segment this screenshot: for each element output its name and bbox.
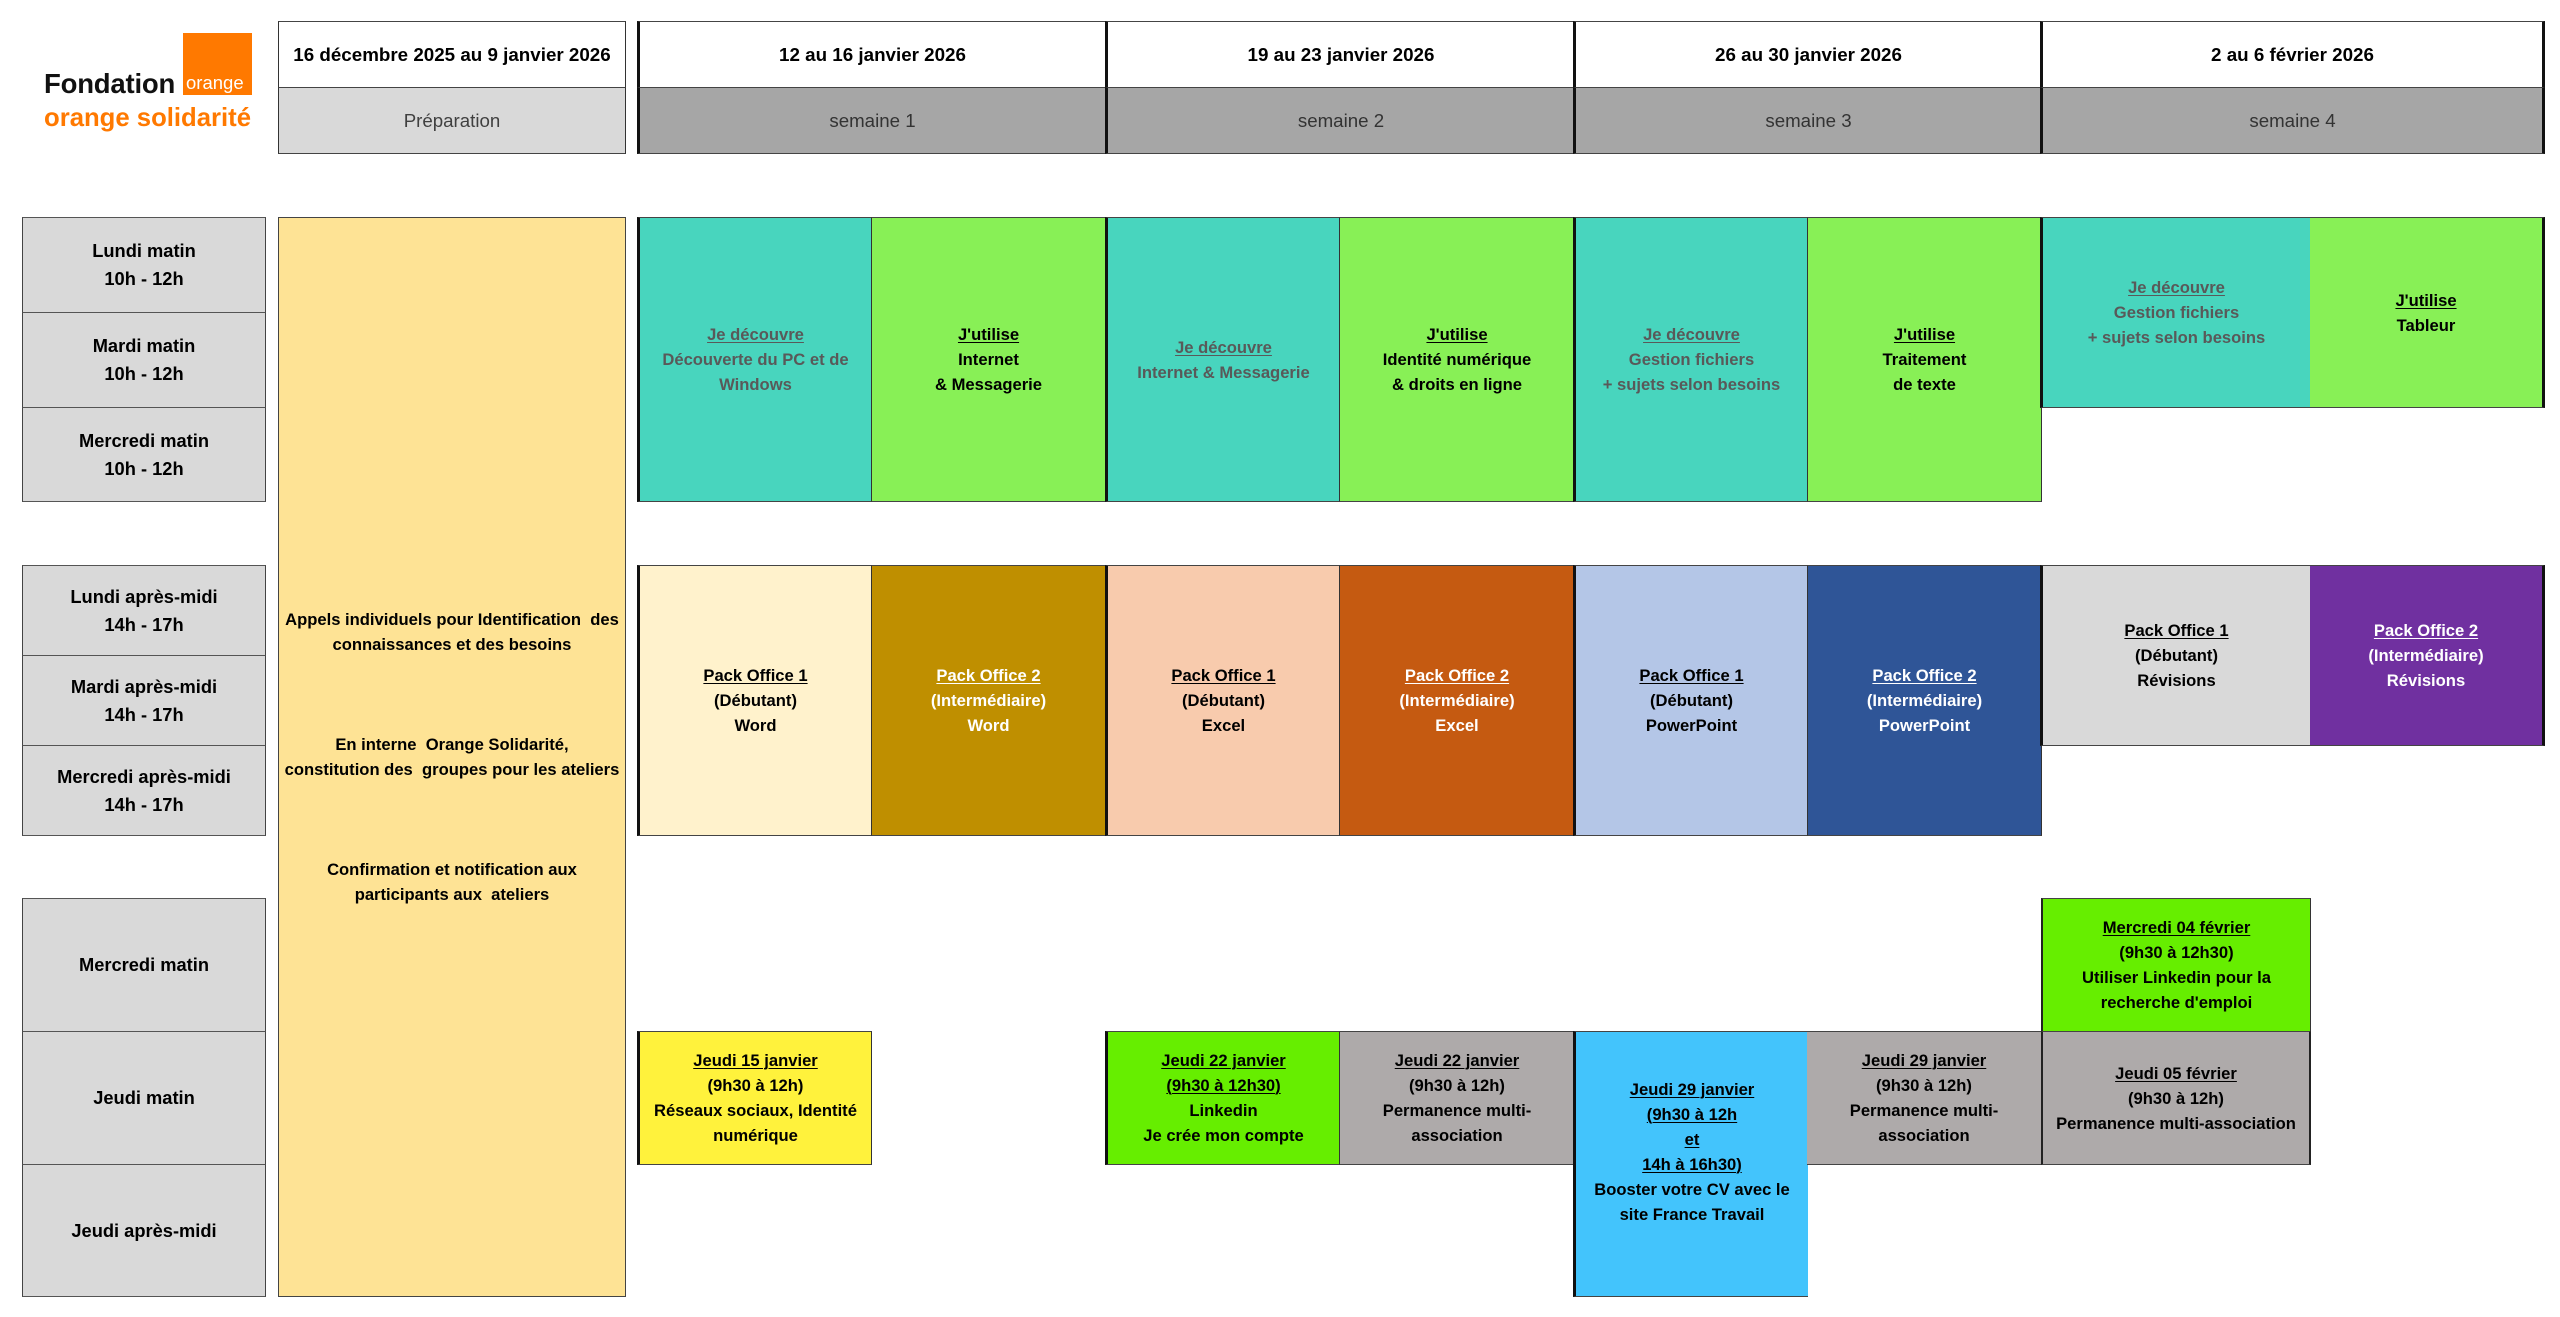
- cell: S2 Pack Office 1 Excel: (Débutant): [1182, 691, 1265, 710]
- cell: S1 Pack Office 1 Word: (Débutant): [714, 691, 797, 710]
- cell: S4 J'utilise: Tableur: [2397, 316, 2455, 334]
- cell: S3 J'utilise: de texte: [1893, 375, 1956, 394]
- header: week 4 dates: [2040, 21, 2545, 88]
- row label: Mardi après-midi: Mardi après-midi: [71, 676, 217, 696]
- cell: Jeudi 29 janvier permanence: (9h30 à 12h): [1876, 1076, 1972, 1095]
- cell: Jeudi 22 janvier Linkedin: Linkedin: [1189, 1101, 1258, 1120]
- cell: S4 Pack Office 1 Révisions: Pack Office 1: [2124, 621, 2229, 640]
- row label: Jeudi matin: Jeudi matin: [93, 1087, 195, 1108]
- icon: orange square: orange: [186, 72, 244, 93]
- cell: S1 Pack Office 1 Word: [637, 565, 872, 836]
- row label: Jeudi matin: [22, 1031, 266, 1165]
- cell: Jeudi 29 janvier booster CV: 14h à 16h30): [1642, 1154, 1742, 1174]
- header: semaine 2: [1105, 87, 1575, 154]
- row label: Mercredi matin (ateliers): Mercredi matin: [79, 954, 209, 975]
- cell: Jeudi 22 janvier Linkedin: [1105, 1031, 1340, 1165]
- row label: Mercredi après-midi: Mercredi après-midi: [57, 766, 231, 786]
- cell: Mercredi 04 février: Utiliser Linkedin pour la: [2082, 968, 2271, 987]
- cell: S3 Pack Office 1 PowerPoint: [1573, 565, 1808, 836]
- cell: S4 Pack Office 1 Révisions: (Débutant): [2135, 646, 2218, 665]
- row label: Mardi matin: 10h - 12h: [104, 363, 184, 384]
- cell: S2 Pack Office 2 Excel: [1339, 565, 1575, 836]
- cell: S1 Je découvre: Je découvre: [707, 325, 804, 344]
- header: week 2 dates: 19 au 23 janvier 2026: [1248, 44, 1434, 65]
- cell: S3 J'utilise: J'utilise: [1894, 325, 1955, 344]
- cell: S2 Pack Office 2 Excel: (Intermédiaire): [1399, 691, 1515, 710]
- cell: S1 Pack Office 2 Word: Word: [967, 716, 1010, 735]
- cell: S3 J'utilise: Traitement: [1883, 350, 1966, 369]
- cell: S2 Pack Office 1 Excel: Pack Office 1: [1171, 666, 1276, 685]
- cell: Jeudi 22 janvier permanence: Jeudi 22 janvier: [1395, 1051, 1519, 1070]
- cell: Jeudi 29 janvier booster CV: (9h30 à 12h: [1647, 1104, 1737, 1124]
- cell: S4 Pack Office 1 Révisions: [2040, 565, 2310, 746]
- cell: S3 Je découvre: Gestion fichiers: [1629, 350, 1754, 369]
- cell: S3 Pack Office 1 PowerPoint: (Débutant): [1650, 691, 1733, 710]
- cell: Jeudi 29 janvier permanence: association: [1878, 1126, 1970, 1145]
- row label: Mercredi matin: 10h - 12h: [104, 458, 184, 478]
- cell: S3 Pack Office 2 PowerPoint: (Intermédiaire): [1867, 691, 1982, 710]
- header: semaine 1: semaine 1: [829, 110, 916, 131]
- cell: S2 J'utilise: Identité numérique: [1383, 350, 1531, 369]
- cell: S2 Je découvre: Je découvre: [1175, 338, 1272, 356]
- cell: Jeudi 15 janvier: Jeudi 15 janvier: [693, 1051, 818, 1070]
- cell: S1 Je découvre: Windows: [719, 375, 792, 394]
- cell: S2 J'utilise: [1339, 217, 1575, 502]
- cell: Jeudi 05 février: [2041, 1031, 2311, 1165]
- cell: Jeudi 15 janvier: numérique: [713, 1126, 798, 1145]
- cell: S2 J'utilise: & droits en ligne: [1392, 375, 1522, 394]
- cell: S4 Pack Office 2 Révisions: Pack Office 2: [2374, 621, 2478, 640]
- logo: Fondation orange solidarité: [44, 33, 252, 132]
- cell: Jeudi 22 janvier permanence: [1339, 1031, 1575, 1165]
- cell: S4 Pack Office 2 Révisions: [2310, 565, 2545, 746]
- cell: Mercredi 04 février: Mercredi 04 février: [2103, 918, 2250, 937]
- panel: préparation steps: constitution des groupes pour les ateliers: [285, 760, 619, 779]
- panel: préparation steps: participants aux ateliers: [355, 885, 549, 904]
- cell: S1 J'utilise: & Messagerie: [935, 375, 1042, 394]
- cell: S1 Pack Office 2 Word: (Intermédiaire): [931, 691, 1046, 710]
- cell: Mercredi 04 février: (9h30 à 12h30): [2119, 943, 2234, 962]
- cell: S3 Pack Office 1 PowerPoint: PowerPoint: [1646, 716, 1737, 735]
- row label: Lundi matin: Lundi matin: [92, 240, 196, 261]
- cell: S2 Je découvre: Internet & Messagerie: [1137, 362, 1310, 382]
- row label: Mercredi après-midi: [22, 745, 266, 836]
- cell: S1 Pack Office 1 Word: Word: [734, 716, 777, 735]
- panel: préparation steps: [278, 217, 626, 1297]
- logo text: Fondation: Fondation: [44, 68, 175, 99]
- cell: S1 Pack Office 2 Word: [871, 565, 1106, 836]
- panel: préparation steps: Appels individuels pour Identification des: [285, 610, 619, 629]
- row label: Lundi après-midi: [22, 565, 266, 656]
- header: week 2 dates: [1105, 21, 1575, 88]
- cell: S3 Je découvre: + sujets selon besoins: [1603, 375, 1780, 394]
- cell: S3 Pack Office 2 PowerPoint: PowerPoint: [1879, 716, 1970, 735]
- row label: Jeudi après-midi: [22, 1164, 266, 1297]
- logo text: orange solidarité: orange solidarité: [44, 104, 251, 132]
- cell: S3 Pack Office 2 PowerPoint: [1807, 565, 2042, 836]
- header: semaine 3: semaine 3: [1765, 110, 1852, 131]
- cell: S3 Pack Office 2 PowerPoint: Pack Office 2: [1872, 666, 1977, 685]
- cell: Jeudi 29 janvier permanence: [1807, 1031, 2042, 1165]
- panel: préparation steps: Confirmation et notification aux: [327, 860, 577, 879]
- header: préparation dates: [278, 21, 626, 88]
- header: week 1 dates: [637, 21, 1106, 88]
- cell: S2 Je découvre: [1105, 217, 1340, 502]
- cell: Jeudi 22 janvier Linkedin: Je crée mon compte: [1143, 1126, 1304, 1145]
- header: week 3 dates: [1573, 21, 2042, 88]
- cell: S4 Pack Office 2 Révisions: Révisions: [2387, 671, 2465, 690]
- cell: Jeudi 15 janvier: Réseaux sociaux, Identité: [654, 1101, 857, 1120]
- row label: Mardi après-midi: [22, 655, 266, 746]
- header: week 3 dates: 26 au 30 janvier 2026: [1715, 44, 1902, 65]
- cell: S3 Pack Office 1 PowerPoint: Pack Office 1: [1639, 666, 1744, 685]
- header: semaine 1: [637, 87, 1106, 154]
- row label: Mardi matin: [22, 312, 266, 408]
- cell: S1 Pack Office 1 Word: Pack Office 1: [703, 666, 808, 685]
- cell: S1 Je découvre: [637, 217, 872, 502]
- panel: préparation steps: connaissances et des besoins: [333, 635, 571, 654]
- cell: S4 Pack Office 2 Révisions: (Intermédiaire): [2368, 646, 2484, 665]
- panel: préparation steps: En interne Orange Solidarité,: [335, 735, 569, 754]
- row label: Mardi après-midi: 14h - 17h: [104, 704, 184, 724]
- cell: S1 Je découvre: Découverte du PC et de: [662, 350, 849, 369]
- row label: Lundi matin: 10h - 12h: [104, 268, 184, 289]
- row label: Mercredi matin: Mercredi matin: [79, 430, 209, 450]
- cell: S2 Pack Office 2 Excel: Excel: [1435, 716, 1479, 735]
- header: semaine 4: [2040, 87, 2545, 154]
- cell: S1 J'utilise: Internet: [958, 350, 1019, 369]
- cell: S4 Pack Office 1 Révisions: Révisions: [2137, 671, 2216, 690]
- cell: S4 Je découvre: + sujets selon besoins: [2088, 328, 2265, 347]
- cell: S4 Je découvre: Gestion fichiers: [2114, 303, 2239, 322]
- cell: Mercredi 04 février: recherche d'emploi: [2101, 993, 2252, 1012]
- icon: orange square: [183, 33, 252, 95]
- row label: Jeudi après-midi: Jeudi après-midi: [71, 1220, 217, 1240]
- cell: S4 J'utilise: [2310, 217, 2545, 408]
- cell: Jeudi 05 février: (9h30 à 12h): [2128, 1088, 2224, 1108]
- cell: S2 Pack Office 1 Excel: [1105, 565, 1340, 836]
- cell: Jeudi 05 février: Permanence multi-association: [2056, 1114, 2296, 1132]
- cell: Jeudi 15 janvier: (9h30 à 12h): [708, 1076, 803, 1095]
- cell: S4 J'utilise: J'utilise: [2395, 290, 2457, 310]
- cell: S3 Je découvre: Je découvre: [1643, 325, 1740, 344]
- cell: S3 J'utilise: [1807, 217, 2042, 502]
- header: semaine 2: semaine 2: [1298, 110, 1384, 131]
- row label: Mercredi matin: [22, 407, 266, 502]
- cell: S2 J'utilise: J'utilise: [1426, 325, 1488, 344]
- row label: Mardi matin: Mardi matin: [93, 335, 195, 356]
- header: semaine 3: [1573, 87, 2042, 154]
- row label: Lundi matin: [22, 217, 266, 313]
- cell: Jeudi 29 janvier booster CV: site France Travail: [1620, 1204, 1764, 1224]
- row label: Lundi après-midi: 14h - 17h: [104, 614, 184, 634]
- cell: S1 Pack Office 2 Word: Pack Office 2: [936, 666, 1041, 685]
- cell: S4 Je découvre: [2040, 217, 2310, 408]
- header: week 4 dates: 2 au 6 février 2026: [2211, 44, 2374, 65]
- cell: Jeudi 29 janvier permanence: Jeudi 29 janvier: [1862, 1051, 1986, 1070]
- cell: Jeudi 22 janvier Linkedin: Jeudi 22 janvier: [1161, 1051, 1286, 1070]
- cell: S2 Pack Office 2 Excel: Pack Office 2: [1405, 666, 1509, 685]
- cell: Jeudi 22 janvier permanence: Permanence multi-: [1383, 1101, 1531, 1120]
- cell: Jeudi 22 janvier Linkedin: (9h30 à 12h30): [1166, 1076, 1281, 1095]
- cell: Mercredi 04 février: [2041, 898, 2311, 1032]
- cell: Jeudi 29 janvier booster CV: et: [1685, 1130, 1699, 1148]
- header: préparation label: [278, 87, 626, 154]
- cell: S4 Je découvre: Je découvre: [2128, 278, 2225, 297]
- cell: Jeudi 22 janvier permanence: (9h30 à 12h): [1409, 1076, 1505, 1095]
- cell: Jeudi 29 janvier booster CV: [1573, 1031, 1808, 1297]
- cell: Jeudi 22 janvier permanence: association: [1411, 1126, 1503, 1145]
- row label: Mercredi après-midi: 14h - 17h: [104, 794, 184, 814]
- header: préparation label: Préparation: [404, 110, 500, 131]
- cell: Jeudi 15 janvier: [637, 1031, 872, 1165]
- header: semaine 4: semaine 4: [2249, 110, 2336, 131]
- cell: S3 Je découvre: [1573, 217, 1808, 502]
- cell: Jeudi 29 janvier booster CV: Jeudi 29 janvier: [1630, 1080, 1754, 1098]
- cell: Jeudi 05 février: Jeudi 05 février: [2115, 1064, 2237, 1082]
- cell: S1 J'utilise: J'utilise: [958, 325, 1019, 344]
- cell: Jeudi 29 janvier booster CV: Booster votre CV avec le: [1594, 1180, 1790, 1198]
- cell: S2 Pack Office 1 Excel: Excel: [1202, 716, 1245, 735]
- row label: Lundi après-midi: Lundi après-midi: [70, 586, 218, 606]
- row label: Mercredi matin (ateliers): [22, 898, 266, 1032]
- header: week 1 dates: 12 au 16 janvier 2026: [779, 44, 966, 65]
- header: préparation dates: 16 décembre 2025 au 9 janvier 2026: [293, 44, 611, 65]
- cell: S1 J'utilise: [871, 217, 1106, 502]
- cell: Jeudi 29 janvier permanence: Permanence multi-: [1850, 1101, 1998, 1120]
